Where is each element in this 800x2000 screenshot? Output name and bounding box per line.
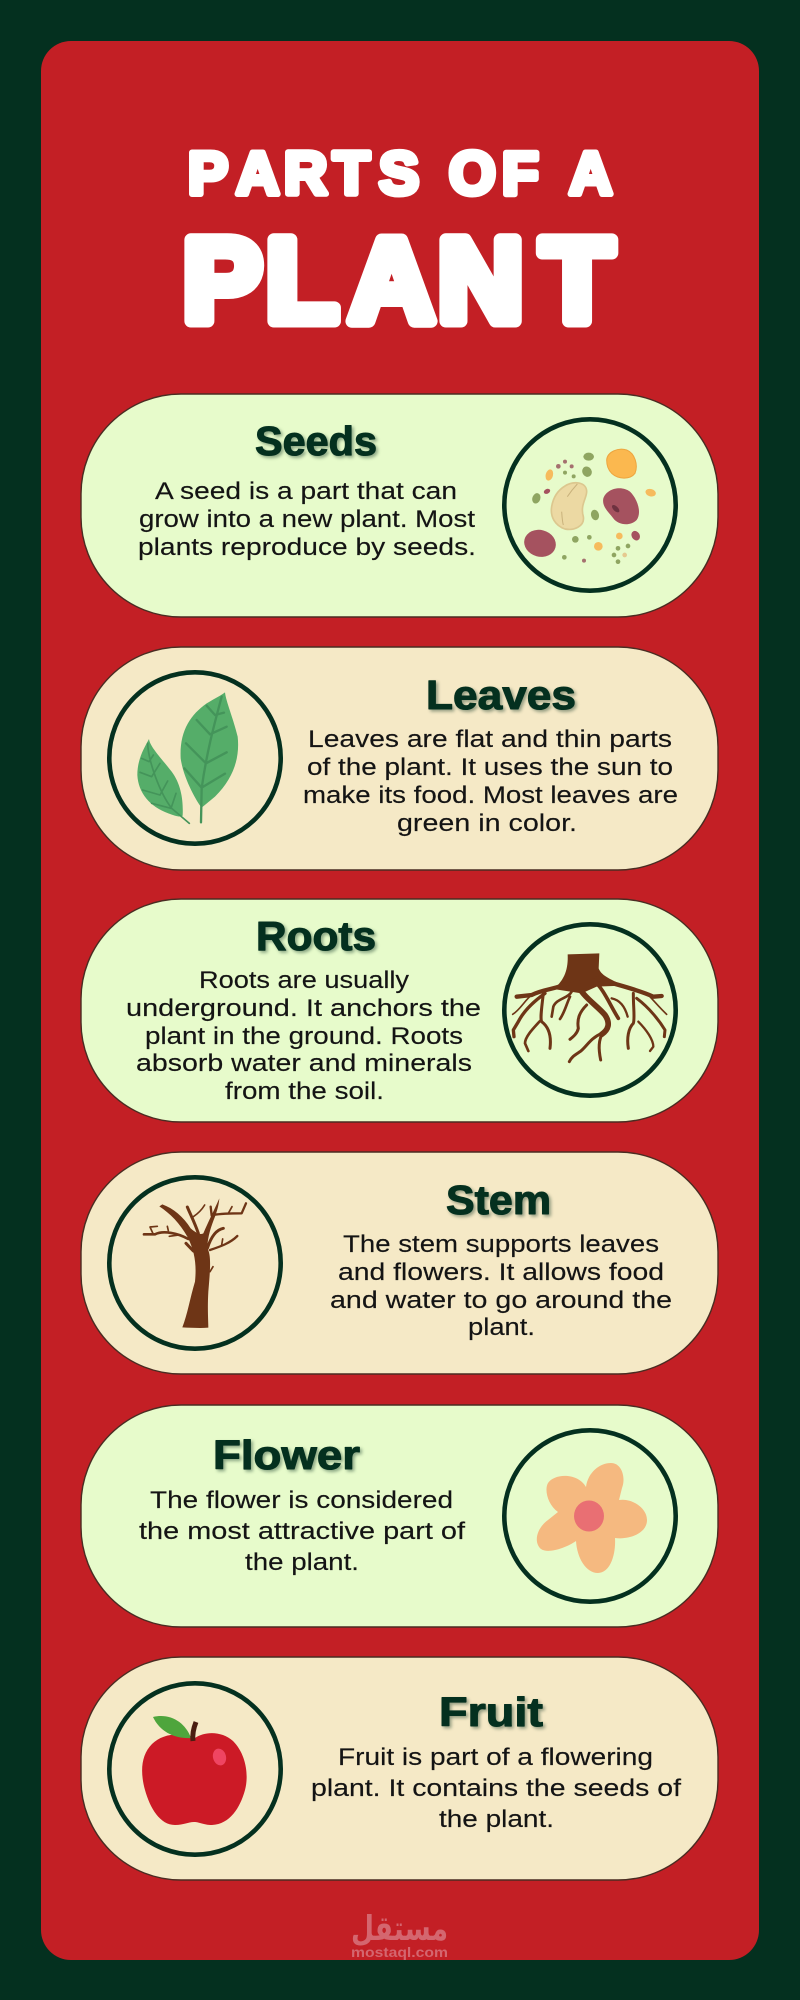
- leaves card background: [81, 647, 718, 870]
- stem text: plant.: [468, 1314, 535, 1341]
- watermark url: mostaql.com: [351, 1944, 448, 1960]
- panel: fruit: [81, 1657, 718, 1880]
- roots text: Roots are usually: [199, 967, 409, 994]
- seeds text: grow into a new plant. Most: [139, 506, 475, 533]
- stem text: and water to go around the: [330, 1287, 672, 1314]
- icon: leaves: [109, 672, 281, 844]
- fruit text: [311, 1744, 681, 1833]
- seeds text: plants reproduce by seeds.: [138, 534, 476, 561]
- panel: leaves: [81, 647, 718, 870]
- stem text: and flowers. It allows food: [338, 1259, 664, 1286]
- roots text: from the soil.: [225, 1078, 384, 1105]
- roots text: absorb water and minerals: [136, 1050, 472, 1077]
- leaves text: green in color.: [397, 810, 577, 837]
- flower text: [139, 1487, 465, 1576]
- panel: seeds: [81, 394, 718, 617]
- icon: tree stem: [109, 1177, 281, 1349]
- seeds card background: [81, 394, 718, 617]
- stem heading: Stem: [446, 1177, 551, 1223]
- fruit text: the plant.: [439, 1806, 554, 1833]
- leaves text: Leaves are flat and thin parts: [308, 726, 672, 753]
- roots text: [126, 967, 481, 1105]
- flower text: the most attractive part of: [139, 1518, 465, 1545]
- flower text: the plant.: [245, 1549, 359, 1576]
- roots heading: Roots: [256, 913, 376, 959]
- stem card background: [81, 1152, 718, 1374]
- panel: flower: [81, 1405, 718, 1627]
- watermark arabic: مستقل: [351, 1909, 448, 1949]
- flower heading: Flower: [213, 1432, 360, 1478]
- fruit text: Fruit is part of a flowering: [338, 1744, 653, 1771]
- fruit card background: [81, 1657, 718, 1880]
- icon: seeds: [504, 419, 676, 591]
- stem text: The stem supports leaves: [343, 1231, 659, 1258]
- roots text: plant in the ground. Roots: [145, 1023, 463, 1050]
- title line: plant: PLANT: [183, 215, 613, 347]
- fruit heading: Fruit: [439, 1689, 543, 1735]
- leaves text: [303, 726, 678, 837]
- icon: apple: [109, 1683, 281, 1855]
- leaves heading: Leaves: [426, 672, 576, 718]
- seeds text: A seed is a part that can: [155, 478, 457, 505]
- fruit text: plant. It contains the seeds of: [311, 1775, 681, 1802]
- roots text: underground. It anchors the: [126, 995, 481, 1022]
- title: [183, 140, 613, 347]
- flower card background: [81, 1405, 718, 1627]
- roots card background: [81, 899, 718, 1122]
- leaves text: make its food. Most leaves are: [303, 782, 678, 809]
- icon: roots: [504, 924, 676, 1096]
- flower text: The flower is considered: [150, 1487, 453, 1514]
- seeds text: [138, 478, 476, 561]
- seeds heading: Seeds: [255, 418, 377, 464]
- leaves text: of the plant. It uses the sun to: [307, 754, 673, 781]
- watermark: [351, 1909, 448, 1960]
- panel: roots: [81, 899, 718, 1122]
- title line: parts of a: PARTS OF A: [188, 140, 612, 207]
- stem text: [330, 1231, 672, 1341]
- panel: stem: [81, 1152, 718, 1374]
- icon: flower: [504, 1430, 676, 1602]
